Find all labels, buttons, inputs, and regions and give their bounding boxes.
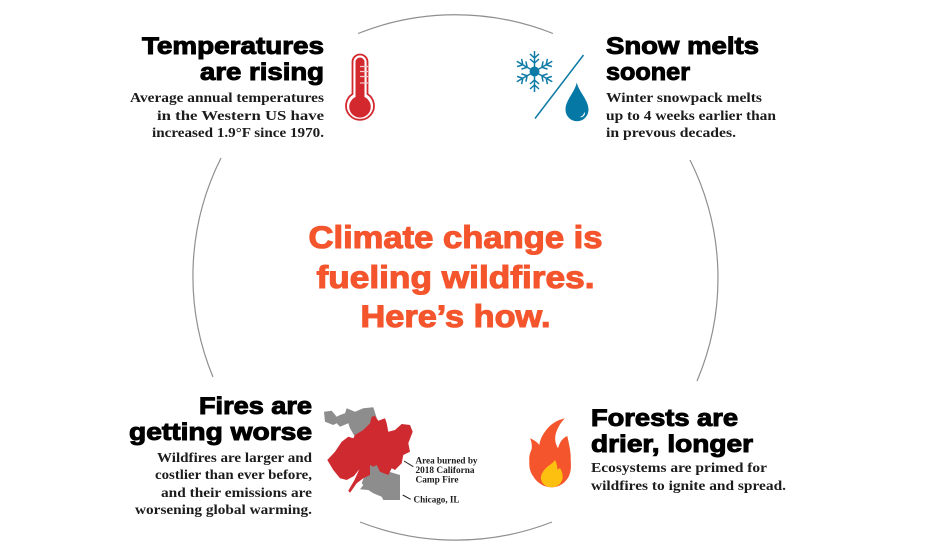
shape: chicago top — [324, 407, 377, 437]
map label: Camp Fire — [416, 474, 459, 484]
text: forests — [591, 460, 786, 493]
icon: thermometer — [346, 55, 374, 120]
map label: 2018 Californa — [416, 465, 475, 475]
circle arcs — [193, 15, 718, 540]
central title — [308, 219, 602, 334]
icon: slash — [535, 55, 584, 118]
text: temperatures: Average annual temperatures — [130, 90, 324, 105]
heading: forests: drier, longer — [591, 431, 753, 458]
map label — [414, 456, 478, 504]
text: fires: worsening global warming. — [135, 502, 312, 517]
heading: forests — [591, 405, 753, 458]
panel: snow — [514, 33, 777, 140]
text: forests: wildfires to ignite and spread. — [591, 478, 786, 493]
text: snow — [606, 90, 777, 140]
heading: snow: sooner — [606, 59, 690, 86]
central title: Climate change is — [308, 219, 602, 255]
text: temperatures: increased 1.9°F since 1970. — [152, 125, 324, 140]
heading: temperatures — [142, 33, 324, 86]
heading: snow — [606, 33, 759, 86]
panel: temperatures — [130, 33, 374, 140]
map label: Area burned by — [416, 456, 478, 466]
text: snow: in prevous decades. — [606, 125, 736, 140]
map: camp fire area — [324, 407, 413, 500]
text: fires: and their emissions are — [161, 485, 312, 500]
heading: temperatures: Temperatures — [142, 33, 324, 60]
text: fires: Wildfires are larger and — [157, 450, 313, 465]
text: fires: costlier than ever before, — [155, 467, 312, 482]
icon: water drop — [566, 82, 588, 121]
leader lines — [403, 461, 413, 499]
text: fires — [135, 450, 313, 517]
panel: forests — [529, 405, 786, 493]
map label: Chicago, IL — [414, 494, 460, 504]
central title: fueling wildfires. — [316, 259, 594, 295]
heading: fires: getting worse — [129, 419, 312, 446]
text: snow: Winter snowpack melts — [606, 90, 762, 105]
heading: fires — [129, 393, 312, 446]
heading: temperatures: are rising — [200, 59, 324, 86]
heading: fires: Fires are — [199, 393, 312, 420]
heading: forests: Forests are — [591, 405, 738, 432]
panel: fires — [129, 393, 478, 517]
central title: Here’s how. — [360, 298, 550, 334]
shape: burned area — [327, 416, 413, 493]
icon: flame — [529, 418, 571, 487]
text: snow: up to 4 weeks earlier than — [606, 108, 777, 123]
shape: chicago bottom — [360, 462, 400, 500]
text: temperatures — [130, 90, 324, 140]
heading: snow: Snow melts — [606, 33, 759, 60]
icon: snowflake — [514, 51, 555, 92]
text: temperatures: in the Western US have — [157, 108, 324, 123]
text: forests: Ecosystems are primed for — [591, 460, 767, 475]
